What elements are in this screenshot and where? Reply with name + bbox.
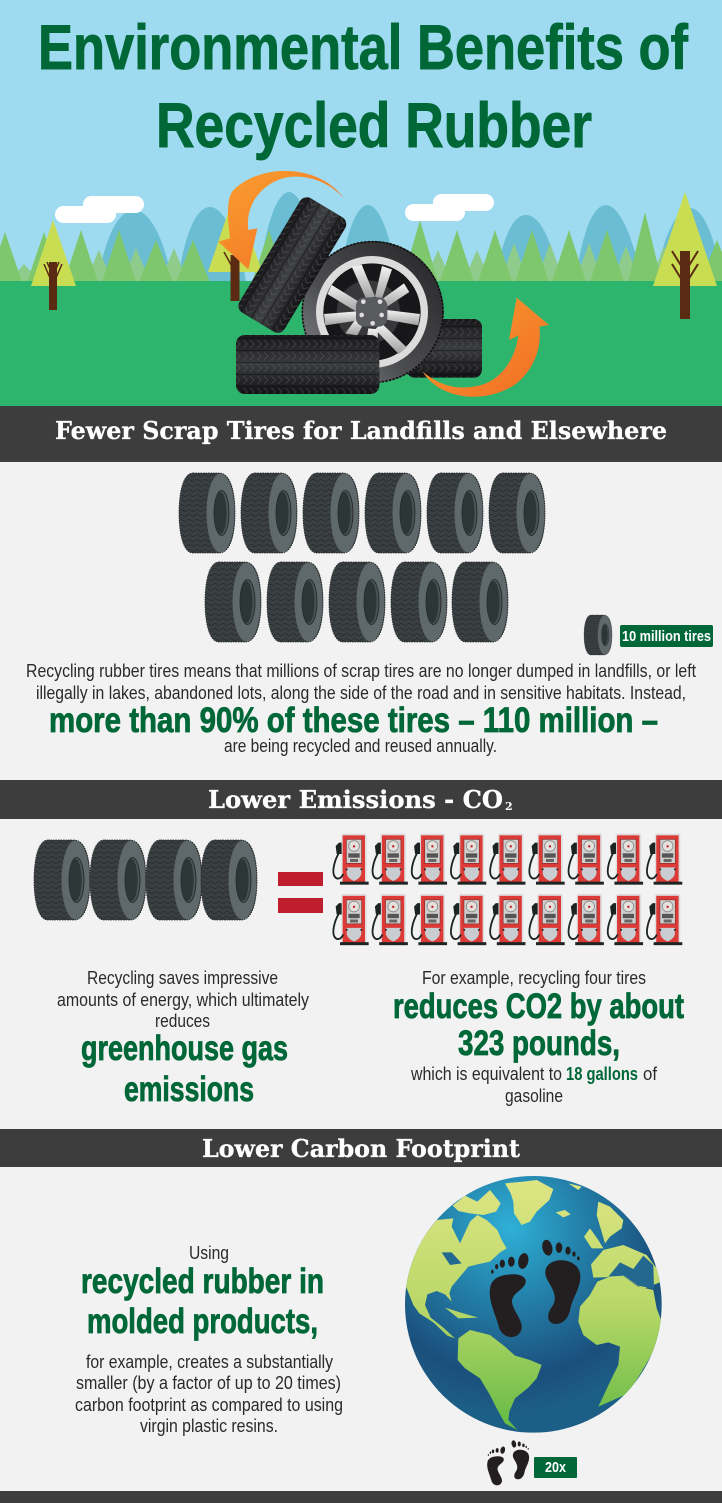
icon: globe with footprints: [403, 1176, 662, 1433]
legend: 10 million tires: [584, 615, 713, 655]
continents: [403, 1180, 662, 1430]
pictogram: four tires: [34, 840, 257, 920]
arrow: bottom: [423, 298, 549, 397]
text block: molded products: molded products,: [87, 1302, 318, 1341]
title: Recycled Rubber: [156, 91, 592, 161]
text block: greenhouse gas: Recycling saves impressive: [87, 968, 278, 988]
inland seas: [442, 1252, 654, 1289]
heading band: Fewer Scrap Tires: Fewer Scrap Tires for Landfills and Elsewhere: [55, 416, 667, 445]
text block: CO2 reduction: [393, 968, 684, 1106]
icon: middle tree: [208, 192, 262, 301]
pictogram: tires row 2: [205, 562, 508, 642]
text block: CO2 reduction: 323 pounds,: [458, 1024, 620, 1063]
pictogram: gas pumps row 1: [333, 833, 682, 885]
heading band: Lower Emissions: 2: [505, 800, 513, 813]
panel: lower emissions: [34, 833, 684, 1109]
text block: molded products: for example, creates a substantially: [86, 1352, 333, 1372]
green forest trees: [0, 212, 722, 282]
text block: molded products: smaller (by a factor of up to 20 times): [76, 1373, 341, 1393]
footer band: [0, 1491, 722, 1503]
hero illustration: [0, 0, 722, 406]
heading band: Lower Emissions: Lower Emissions - CO: [208, 785, 503, 814]
heading band: Lower Emissions: [0, 780, 722, 819]
footprints: [490, 1239, 580, 1337]
text block: CO2 reduction: For example, recycling four tires: [422, 968, 646, 988]
arrow: top: [218, 171, 344, 269]
pale background trees: [8, 243, 678, 282]
text block: molded products: carbon footprint as compared to using: [75, 1395, 343, 1415]
back tire: [407, 319, 482, 378]
text block: greenhouse gas: amounts of energy, which ultimately: [57, 990, 309, 1010]
icon: right tree: [653, 192, 717, 319]
title: [38, 13, 689, 161]
icon: equals sign: [278, 872, 323, 913]
heading band: Fewer Scrap Tires: [0, 406, 722, 462]
text block: recycling tires: are being recycled and reused annually.: [224, 736, 497, 756]
text block: greenhouse gas: greenhouse gas: [81, 1029, 288, 1068]
clouds: [55, 194, 494, 223]
text block: molded products: Using: [189, 1243, 229, 1263]
icon: left tree: [31, 220, 76, 310]
text block: greenhouse gas: emissions: [124, 1070, 254, 1109]
text block: recycling tires: [26, 661, 696, 756]
panel: scrap tires: [26, 473, 713, 756]
heading band: Lower Carbon Footprint: Lower Carbon Footprint: [202, 1134, 520, 1163]
text block: greenhouse gas: reduces: [155, 1011, 210, 1031]
front bottom tire: [236, 335, 379, 394]
ground: [0, 281, 722, 406]
distant mountains: [98, 192, 722, 282]
text block: CO2 reduction: gasoline: [505, 1086, 563, 1106]
text block: molded products: virgin plastic resins.: [140, 1416, 278, 1436]
pictogram: tires row 1: [179, 473, 545, 553]
text block: greenhouse gas: [57, 968, 309, 1109]
upright wheel: [302, 241, 444, 383]
icon: tire pile with recycling arrows: [218, 171, 549, 397]
text block: molded products: [75, 1243, 343, 1436]
panel: carbon footprint: [75, 1176, 662, 1485]
leaning tire: [235, 194, 349, 336]
text block: CO2 reduction: 18 gallons: [566, 1064, 638, 1084]
text block: CO2 reduction: of: [643, 1064, 658, 1084]
text block: molded products: recycled rubber in: [81, 1262, 324, 1301]
pictogram: gas pumps row 2: [333, 894, 682, 945]
legend: 20x footprints: [487, 1440, 577, 1485]
heading band: Lower Carbon Footprint: [0, 1129, 722, 1167]
legend: 20x footprints: 20x: [545, 1459, 567, 1476]
text block: CO2 reduction: which is equivalent to: [410, 1064, 562, 1084]
